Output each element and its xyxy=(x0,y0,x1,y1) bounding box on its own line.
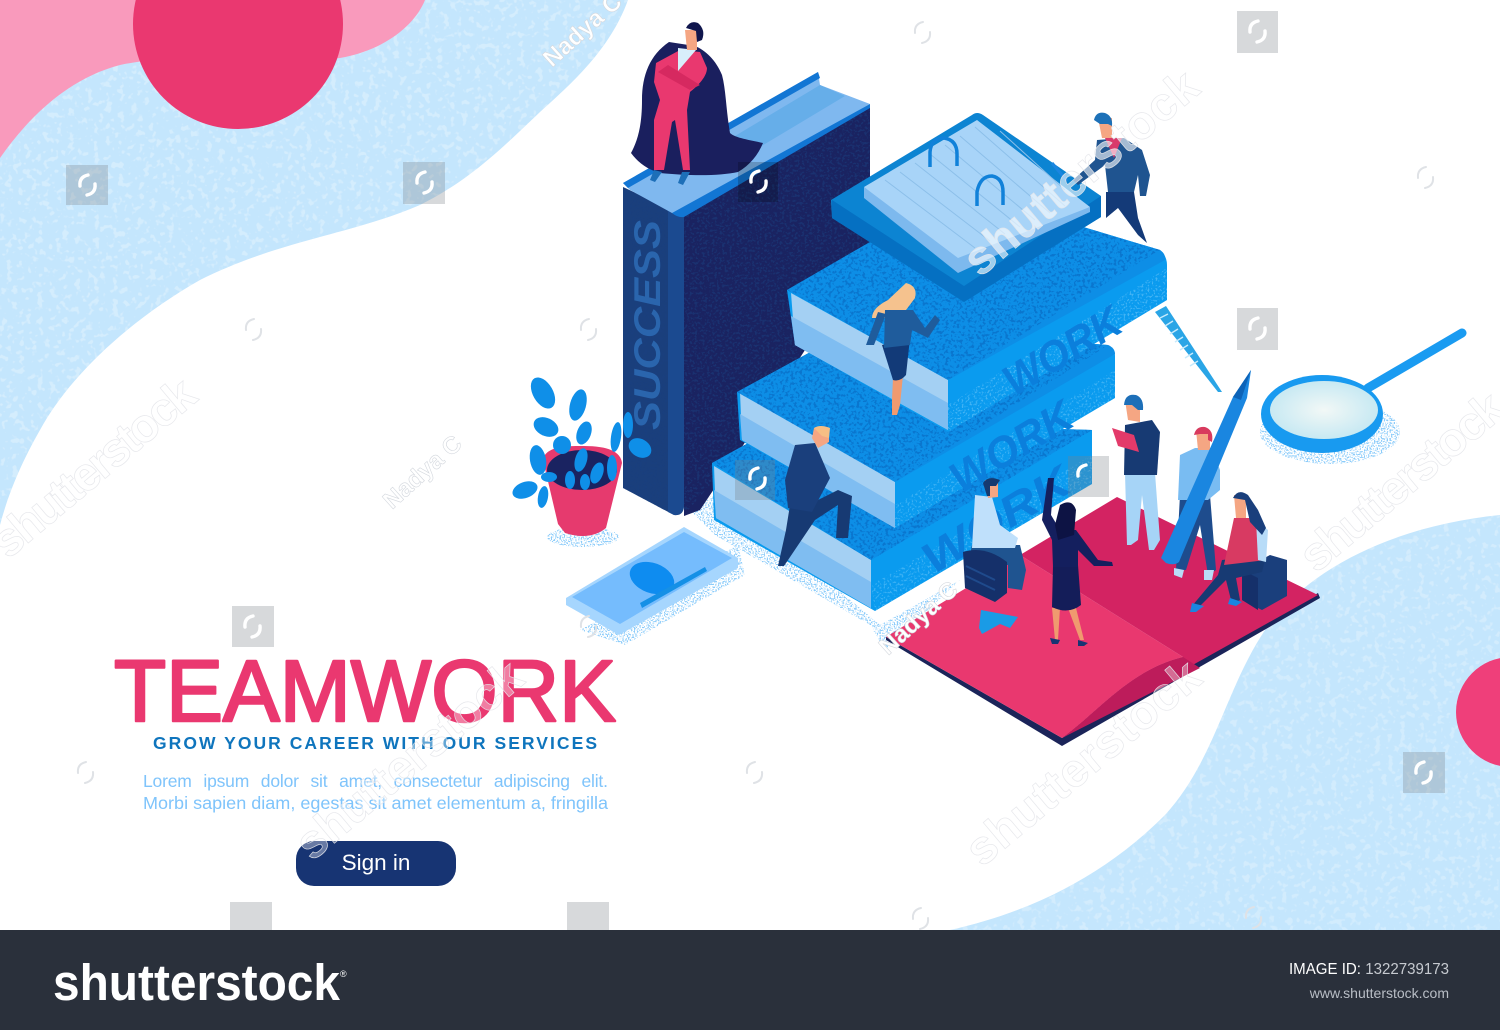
banknote xyxy=(566,527,738,635)
torso xyxy=(1124,420,1160,475)
sign in button xyxy=(296,841,456,886)
notebook xyxy=(831,113,1101,302)
hair xyxy=(983,478,1000,496)
dark half xyxy=(1020,497,1318,738)
spine xyxy=(623,187,684,515)
stippled ground shadows xyxy=(547,400,1400,650)
skirt xyxy=(882,338,910,380)
top pages xyxy=(623,72,870,214)
watermarks: shutterstock xyxy=(952,58,1209,286)
legs xyxy=(1106,192,1147,243)
pot xyxy=(543,446,622,536)
legs xyxy=(1176,495,1216,575)
pages xyxy=(864,120,1090,267)
person: sitting woman with stool xyxy=(1190,492,1287,612)
body and legs xyxy=(654,50,707,170)
leaves xyxy=(510,373,655,509)
torso xyxy=(785,443,830,512)
hair xyxy=(1124,395,1143,410)
spine title: SUCCESS xyxy=(627,220,668,430)
torso xyxy=(1224,518,1266,565)
head xyxy=(985,480,998,498)
hair xyxy=(1094,113,1112,126)
head xyxy=(812,428,829,448)
legs xyxy=(968,545,1026,590)
shirt and tie xyxy=(1105,138,1122,158)
magnifying glass xyxy=(1261,333,1462,453)
shoes xyxy=(1190,598,1242,612)
body text xyxy=(143,771,608,813)
shirt xyxy=(678,48,696,71)
person: man with big pencil xyxy=(1161,370,1251,580)
torso and arms xyxy=(1042,478,1113,567)
hair xyxy=(872,283,916,318)
body text: Lorem ipsum dolor sit amet, consectetur adipiscing elit. xyxy=(143,771,608,791)
legs xyxy=(778,490,852,566)
heading: TEAMWORK xyxy=(114,643,616,740)
footer logo: ® xyxy=(340,969,347,979)
person: man pushing notebook xyxy=(1052,113,1150,243)
person: standing woman xyxy=(1042,478,1113,646)
hair xyxy=(1055,502,1076,540)
person: climbing woman xyxy=(866,283,940,415)
head xyxy=(1234,495,1246,518)
boots xyxy=(650,170,690,185)
spine title: WORK xyxy=(941,390,1084,503)
person: climbing man xyxy=(778,426,852,566)
book: SUCCESS xyxy=(620,72,875,520)
torso xyxy=(1178,448,1220,500)
watermarks: shutterstock xyxy=(954,648,1211,876)
head xyxy=(685,30,697,50)
top-left red circle xyxy=(133,0,343,129)
footer image id: www.shutterstock.com xyxy=(1309,985,1449,1001)
pages xyxy=(740,392,895,528)
spine title: WORK xyxy=(994,296,1133,406)
soil xyxy=(547,450,617,490)
top-left pink blob xyxy=(0,0,425,158)
person: sitting man with stool xyxy=(963,478,1026,602)
handle xyxy=(1368,333,1462,388)
bottom-right light blue blob xyxy=(940,510,1500,930)
ruled lines xyxy=(885,127,1065,248)
head xyxy=(1196,430,1210,450)
sign in button: Sign in xyxy=(342,850,410,875)
pencil xyxy=(1161,370,1251,564)
footer image id xyxy=(1289,961,1449,1001)
rim xyxy=(1261,375,1383,453)
pen lying under top book xyxy=(1155,306,1222,392)
watermarks: Nadya C xyxy=(874,576,963,660)
book stack: top WORK book xyxy=(787,227,1167,432)
hair xyxy=(686,22,703,42)
bar xyxy=(640,567,707,608)
pages xyxy=(791,293,948,430)
plant in pot xyxy=(510,373,655,536)
arm xyxy=(866,312,886,345)
crossed arm xyxy=(658,65,700,90)
legs xyxy=(892,375,903,415)
skirt xyxy=(1052,565,1081,611)
dark side face xyxy=(684,105,870,516)
red open book xyxy=(886,497,1320,746)
legs xyxy=(1052,608,1084,640)
person: superhero on book xyxy=(631,22,763,185)
book stack: middle WORK book xyxy=(737,344,1115,528)
footer logo: shutterstock xyxy=(53,954,341,1011)
stool xyxy=(1242,555,1287,610)
pen xyxy=(1052,163,1067,181)
right pink circle xyxy=(1456,657,1500,767)
top-left light blue blob xyxy=(0,0,640,530)
red book xyxy=(1112,428,1139,452)
oval xyxy=(625,556,679,600)
head xyxy=(1098,118,1112,138)
pants xyxy=(1125,473,1160,550)
base xyxy=(831,113,1101,302)
pages xyxy=(714,466,871,608)
blue hat on book xyxy=(979,610,1018,634)
footer bar xyxy=(0,930,1500,1030)
book stack: bottom WORK book xyxy=(710,418,1095,615)
hair xyxy=(1194,427,1212,442)
rings xyxy=(930,138,957,167)
cape xyxy=(631,42,763,175)
hair xyxy=(814,426,830,438)
watermarks: Nadya C xyxy=(378,430,467,514)
stool xyxy=(963,550,1007,602)
body text: Morbi sapien diam, egestas sit amet elementum a, fringilla xyxy=(143,793,608,813)
hair xyxy=(1233,492,1266,535)
shirt xyxy=(972,495,1018,548)
lower page curl xyxy=(1062,657,1200,738)
light half xyxy=(886,555,1183,738)
edge xyxy=(886,593,1320,746)
watermarks: shutterstock xyxy=(284,649,534,870)
head xyxy=(1125,400,1140,422)
torso and arms xyxy=(1073,138,1150,196)
lens xyxy=(1270,381,1378,439)
spine title: WORK xyxy=(913,456,1083,584)
person: man with red book xyxy=(1112,395,1160,550)
footer image id: IMAGE ID: 1322739173 xyxy=(1289,961,1449,978)
legs xyxy=(1192,555,1266,608)
torso xyxy=(884,310,940,348)
subheading: GROW YOUR CAREER WITH OUR SERVICES xyxy=(153,733,597,753)
